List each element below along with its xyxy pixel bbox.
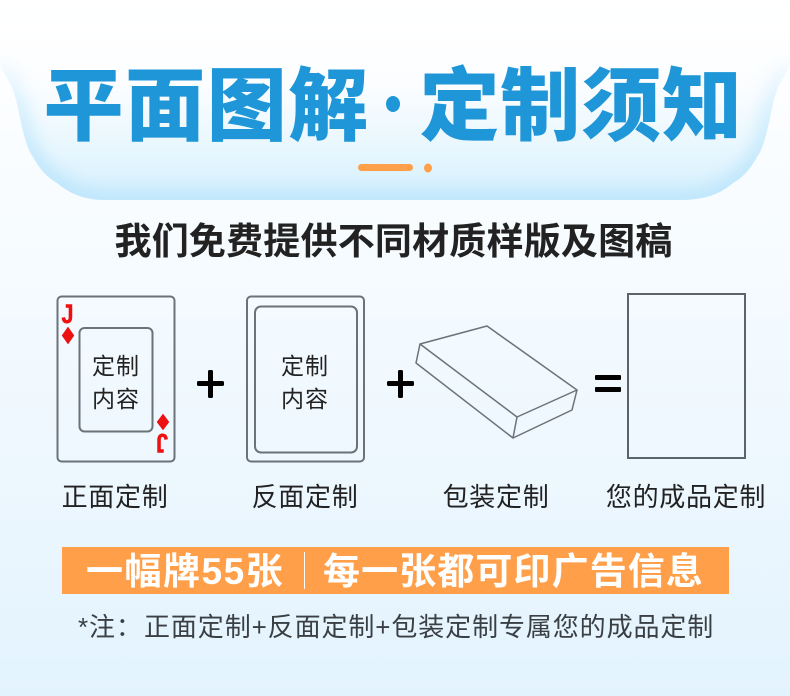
step labels: 您的成品定制 xyxy=(606,482,766,512)
orange accent bar and dot xyxy=(358,164,432,172)
step labels: 正面定制 xyxy=(62,482,168,512)
header curved panel xyxy=(2,66,789,200)
front card inner text: 内容 xyxy=(92,386,140,412)
icon: jack of diamonds top: J xyxy=(61,300,74,330)
banner text left: 一幅牌55张 xyxy=(86,551,284,592)
back card inner text: 定制 xyxy=(281,353,329,379)
title xyxy=(44,62,743,151)
icon: jack of diamonds top xyxy=(61,300,74,344)
step labels: 反面定制 xyxy=(252,482,358,512)
front card inner content frame xyxy=(80,328,152,432)
footnote: *注： xyxy=(78,612,143,642)
back card inner text: 内容 xyxy=(281,386,329,412)
card: front customization xyxy=(58,296,174,462)
back card inner text xyxy=(281,353,329,412)
plus sign 2 xyxy=(387,370,414,398)
title: 定制须知 xyxy=(420,62,743,151)
banner divider xyxy=(304,552,305,589)
icon: jack of diamonds bottom: J xyxy=(156,427,168,457)
orange banner xyxy=(62,547,729,594)
back card inner frame xyxy=(255,306,357,452)
front card inner text: 定制 xyxy=(92,353,140,379)
front card inner text xyxy=(92,353,140,412)
step labels xyxy=(62,482,766,512)
footnote: 正面定制+反面定制+包装定制专属您的成品定制 xyxy=(144,612,714,642)
plus sign 1 xyxy=(197,370,224,398)
icon: packaging box xyxy=(416,326,577,438)
finished product rectangle xyxy=(628,294,745,458)
title: 平面图解 xyxy=(44,62,370,151)
icon: jack of diamonds bottom xyxy=(156,414,169,457)
step labels: 包装定制 xyxy=(443,482,549,512)
card: back customization xyxy=(247,296,364,462)
equals sign xyxy=(595,375,621,392)
title separator dot xyxy=(386,96,400,112)
banner text right: 每一张都可印广告信息 xyxy=(323,551,704,592)
subtitle: 我们免费提供不同材质样版及图稿 xyxy=(114,221,672,262)
